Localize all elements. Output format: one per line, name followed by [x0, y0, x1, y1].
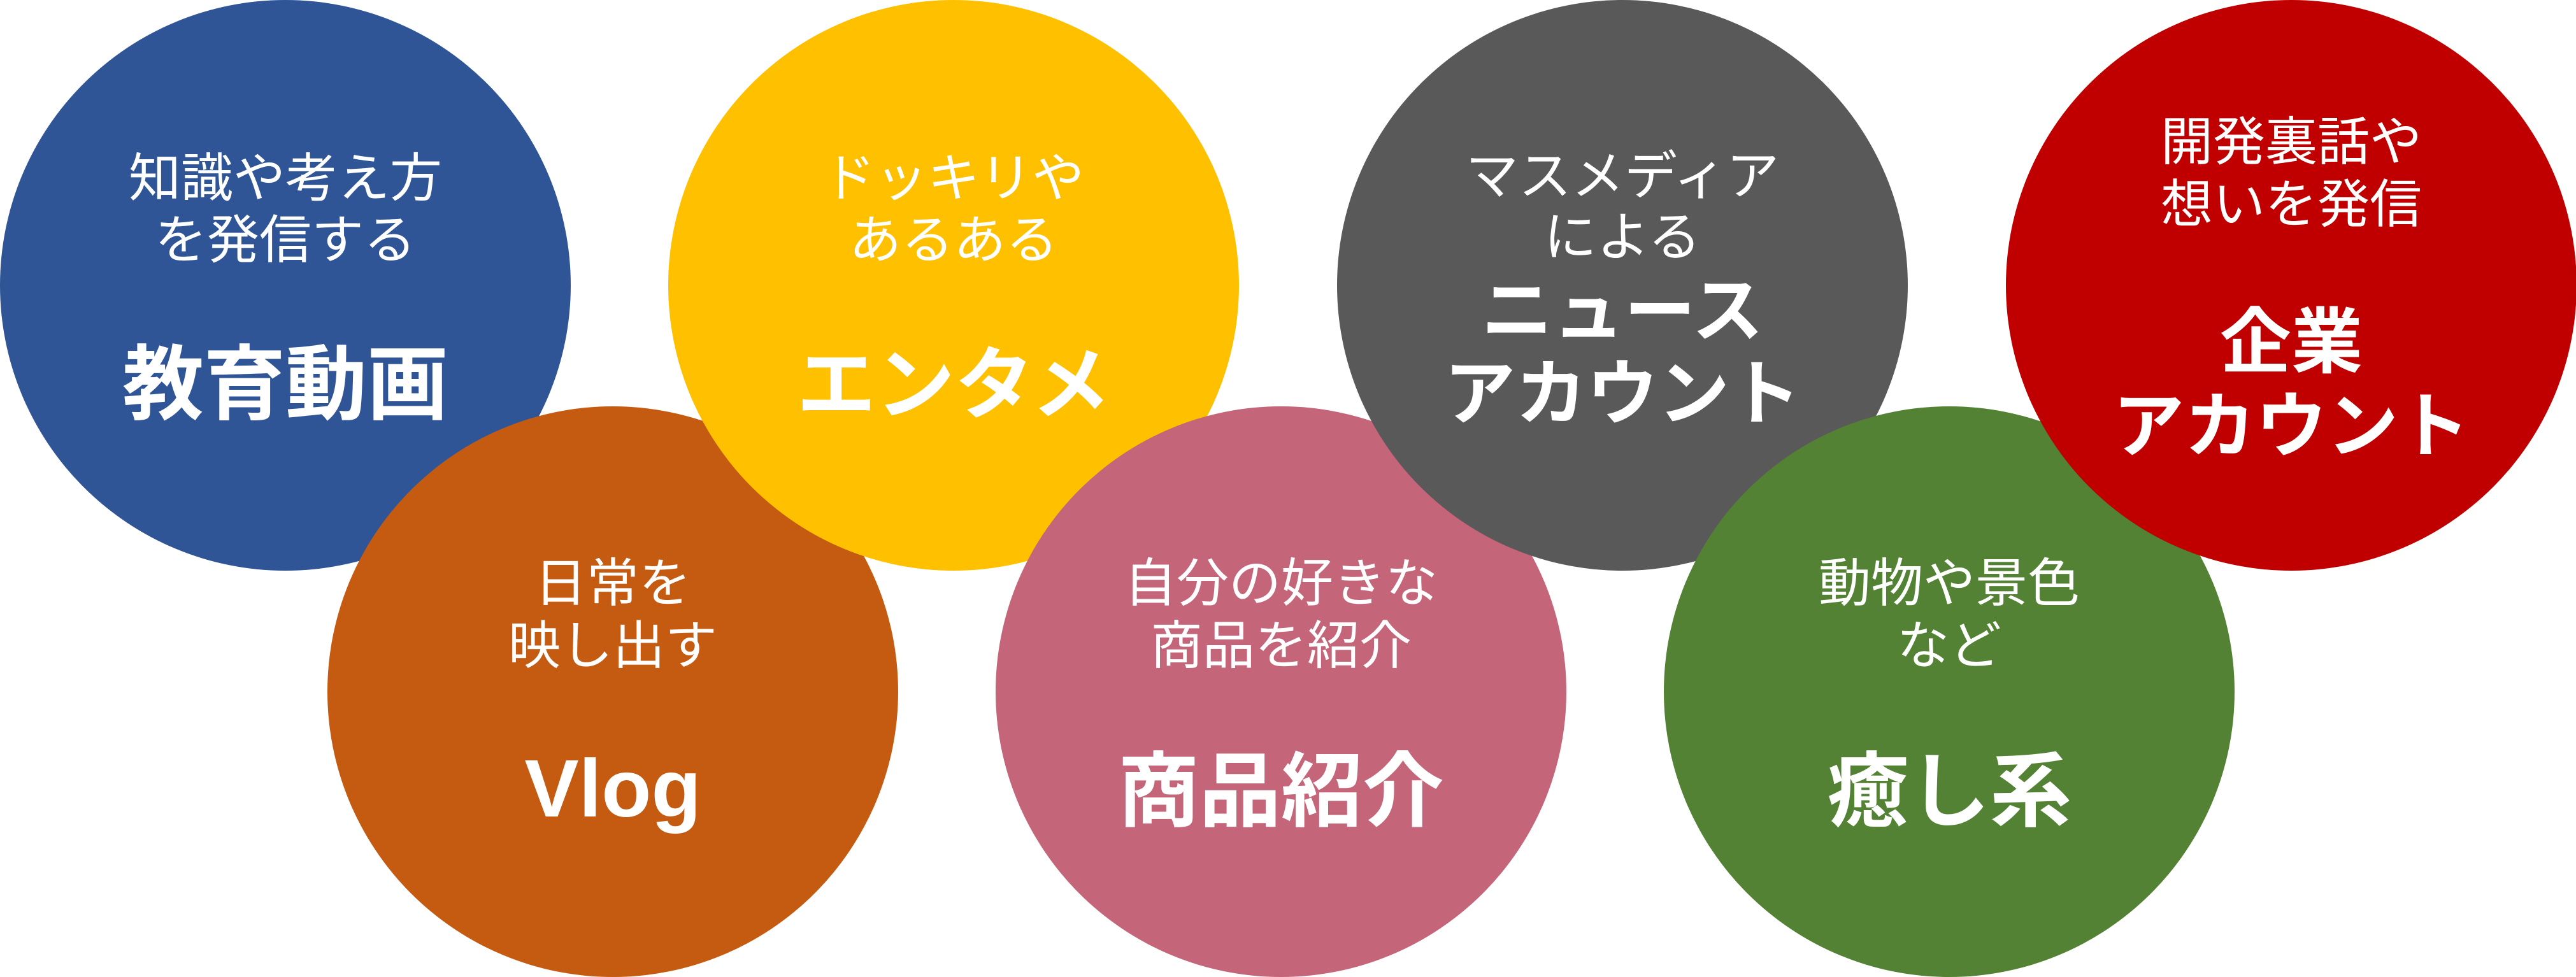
heading: 企業アカウント: アカウント: [2113, 387, 2470, 466]
description: 企業アカウント: 開発裏話や: [2161, 113, 2422, 171]
description: 癒し系: 動物や景色: [1819, 555, 2080, 613]
panel: 癒し系: [1664, 406, 2235, 977]
description: 癒し系: [1819, 555, 2080, 675]
description: Vlog: 映し出す: [508, 617, 717, 675]
heading: ニュースアカウント: アカウント: [1444, 354, 1801, 434]
heading: Vlog: Vlog: [524, 743, 701, 834]
heading: 癒し系: 癒し系: [1827, 746, 2072, 838]
description: 商品紹介: 自分の好きな: [1124, 555, 1438, 613]
panel: 商品紹介: [996, 406, 1566, 977]
description: 企業アカウント: [2161, 113, 2422, 234]
description: 教育動画: [129, 150, 442, 269]
heading: 教育動画: 教育動画: [122, 339, 448, 431]
heading: エンタメ: エンタメ: [797, 341, 1110, 429]
description: 癒し系: など: [1897, 617, 2001, 675]
description: Vlog: [508, 555, 717, 675]
panel: Vlog: [327, 406, 898, 977]
heading: 企業アカウント: [2113, 303, 2470, 466]
panel: 教育動画: [0, 0, 571, 571]
heading: ニュースアカウント: ニュース: [1482, 271, 1763, 351]
panel: エンタメ: [668, 0, 1239, 571]
description: エンタメ: ドッキリや: [823, 150, 1084, 208]
heading: 企業アカウント: 企業: [2220, 303, 2363, 382]
heading: ニュースアカウント: [1444, 271, 1801, 434]
description: Vlog: 日常を: [534, 555, 691, 613]
description: 企業アカウント: 想いを発信: [2161, 176, 2422, 234]
description: エンタメ: あるある: [849, 211, 1058, 269]
panel: 企業アカウント: [2006, 0, 2576, 571]
description: ニュースアカウント: マスメディア: [1466, 146, 1779, 206]
heading: 商品紹介: 商品紹介: [1118, 746, 1444, 838]
panel: ニュースアカウント: [1337, 0, 1908, 571]
description: ニュースアカウント: による: [1544, 208, 1701, 267]
description: エンタメ: [823, 150, 1084, 269]
description: 教育動画: を発信する: [155, 211, 416, 269]
description: 教育動画: 知識や考え方: [129, 150, 442, 208]
description: 商品紹介: [1124, 555, 1438, 675]
description: ニュースアカウント: [1466, 146, 1779, 267]
description: 商品紹介: 商品を紹介: [1150, 617, 1412, 675]
